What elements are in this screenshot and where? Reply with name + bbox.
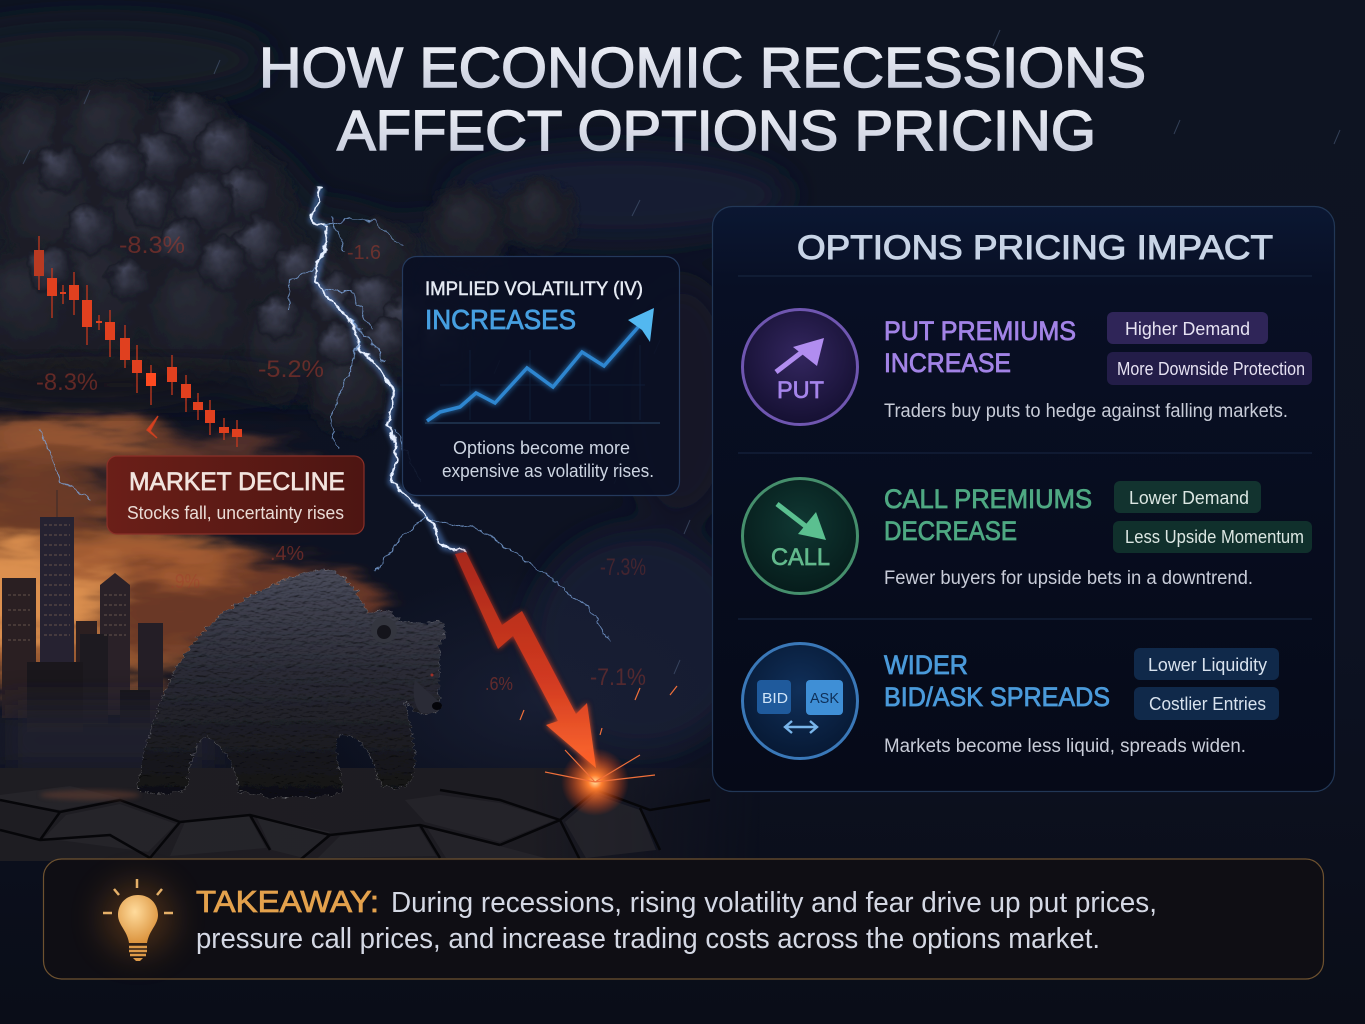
row: put premiums: PUT PREMIUMS	[884, 316, 1076, 346]
title: AFFECT OPTIONS PRICING	[337, 99, 1096, 163]
icon: call circle: CALL	[771, 544, 830, 571]
rain streaks	[23, 30, 1340, 674]
cloud shadow over orange edge	[0, 367, 310, 403]
chip: lower liquidity: Lower Liquidity	[1148, 655, 1267, 675]
callout: market decline: Stocks fall, uncertainty rises	[127, 503, 344, 523]
row: call premiums: Fewer buyers for upside bets in a downtrend.	[884, 568, 1253, 589]
storm clouds	[0, 75, 582, 440]
icon: bid ask circle: ASK	[810, 690, 839, 707]
chip: less upside momentum	[1113, 521, 1312, 553]
takeaway banner: During recessions, rising volatility and fear drive up put prices,	[391, 887, 1157, 919]
panel heading: OPTIONS PRICING IMPACT	[797, 229, 1273, 267]
title	[259, 36, 1146, 163]
panel: implied volatility: Options become more	[453, 438, 630, 458]
row: call premiums: CALL PREMIUMS	[884, 484, 1092, 514]
panel: implied volatility: INCREASES	[425, 304, 576, 335]
candlestick chart	[34, 236, 242, 447]
faded percentage labels: .6%	[485, 674, 513, 694]
panel: implied volatility: IMPLIED VOLATILITY (IV)	[425, 279, 643, 300]
faded percentage labels	[36, 232, 646, 694]
cloud base mass	[0, 110, 500, 398]
row: put premiums: Traders buy puts to hedge against falling markets.	[884, 401, 1288, 422]
chip: costlier entries: Costlier Entries	[1149, 694, 1266, 714]
row: call premiums	[742, 478, 1312, 594]
faded percentage labels: -1.6	[347, 242, 381, 264]
chip: lower liquidity	[1134, 648, 1279, 680]
row: bid ask spreads	[742, 644, 1279, 758]
chip: lower demand	[1114, 481, 1261, 513]
chip: higher demand	[1107, 312, 1268, 344]
takeaway banner	[44, 859, 1324, 979]
row: bid ask spreads: BID/ASK SPREADS	[884, 682, 1110, 712]
takeaway banner: pressure call prices, and increase trading costs across the options market.	[196, 923, 1100, 955]
faded percentage labels: .4%	[270, 543, 304, 565]
chip: more downside protection: More Downside Protection	[1117, 359, 1305, 379]
bear	[138, 569, 445, 798]
chip: costlier entries	[1134, 687, 1279, 720]
faded percentage labels: -5.2%	[258, 356, 324, 383]
title: HOW ECONOMIC RECESSIONS	[259, 36, 1146, 100]
faded percentage labels: -8.3%	[36, 369, 98, 396]
icon: light bulb	[102, 879, 174, 961]
panel: implied volatility	[402, 256, 680, 496]
faint sky clouds	[0, 20, 790, 750]
takeaway banner: TAKEAWAY:	[196, 884, 379, 919]
red falling arrow	[455, 552, 596, 768]
icon: call circle	[742, 478, 858, 594]
panel: implied volatility: expensive as volatility rises.	[442, 461, 654, 481]
icon: put circle	[742, 310, 858, 424]
lightning bolt	[40, 187, 610, 640]
icon: bid ask circle	[742, 644, 858, 758]
row: call premiums: DECREASE	[884, 516, 1017, 546]
storm haze right of bear	[320, 570, 760, 830]
row: bid ask spreads: Markets become less liquid, spreads widen.	[884, 736, 1246, 757]
faded percentage labels: .9%	[170, 571, 200, 593]
chip: lower demand: Lower Demand	[1129, 488, 1249, 508]
callout: market decline	[107, 456, 364, 534]
icon: bid ask circle: BID	[762, 690, 788, 707]
chip: less upside momentum: Less Upside Momentum	[1125, 527, 1304, 547]
panel: options pricing impact	[712, 206, 1334, 792]
cracked ground	[0, 768, 760, 862]
faded percentage labels: -7.1%	[590, 664, 646, 691]
impact sparks	[520, 686, 677, 816]
chip: higher demand: Higher Demand	[1125, 319, 1250, 339]
chip: more downside protection	[1107, 352, 1312, 385]
city skyline	[0, 490, 220, 775]
line chart: rising volatility	[425, 308, 660, 423]
row: put premiums	[742, 310, 1312, 424]
callout: market decline: MARKET DECLINE	[129, 468, 345, 496]
row: bid ask spreads: WIDER	[884, 650, 968, 680]
faded percentage labels: -7.3%	[600, 554, 646, 581]
faded percentage labels: -8.3%	[119, 232, 185, 259]
sunset glow and orange wisps	[0, 414, 380, 690]
icon: put circle: PUT	[777, 377, 824, 404]
row: put premiums: INCREASE	[884, 348, 1011, 378]
